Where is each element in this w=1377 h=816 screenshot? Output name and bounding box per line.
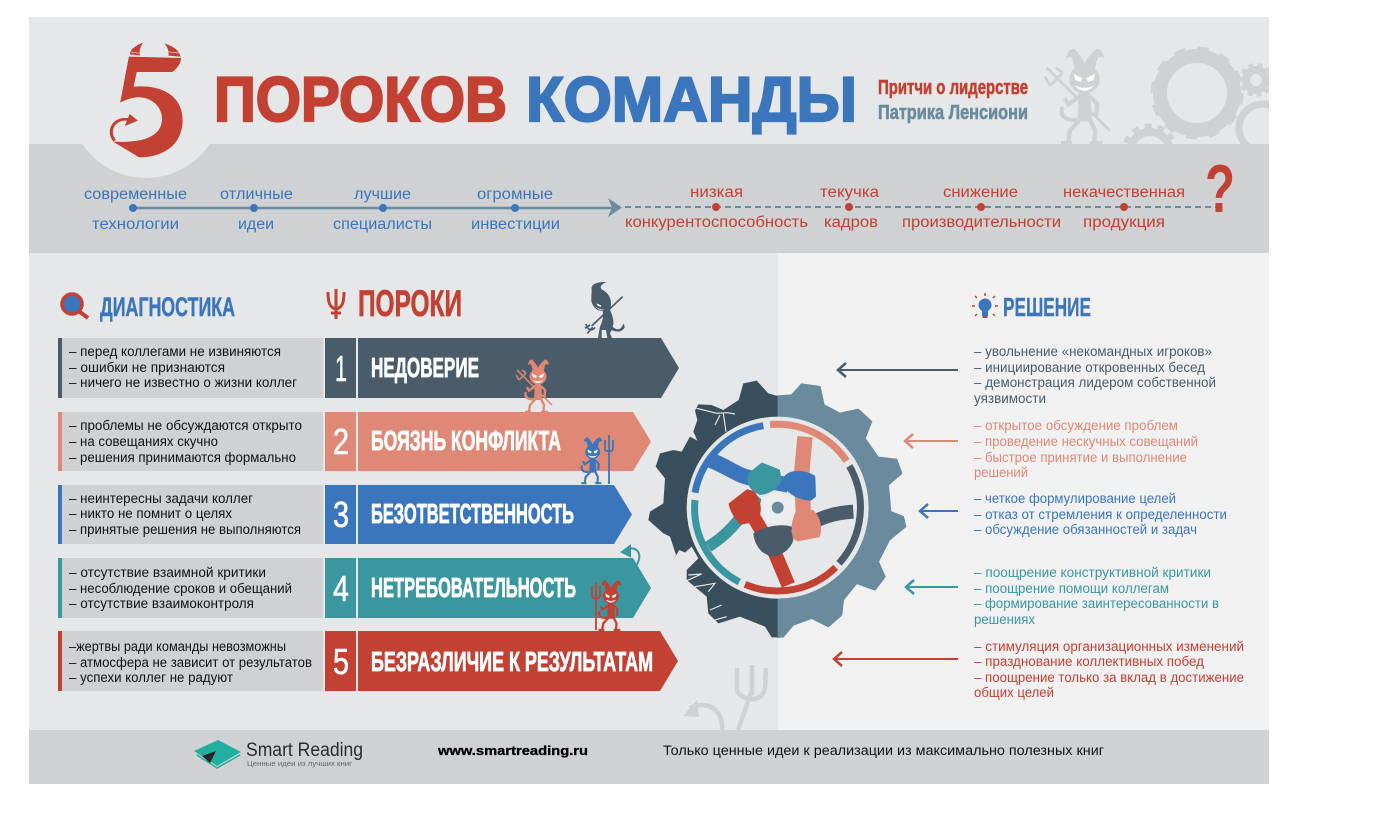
timeline: assets [84,186,622,233]
solutions 5: – поощрение только за вклад в достижение [974,670,1244,685]
gear: inner disc [687,417,869,599]
row 4: diagnostics: – отсутствие взаимоконтроля [69,596,254,611]
footer logo: Smart Reading [246,740,363,761]
gear: broken half [648,381,778,637]
row 4: vice arrow: 4 [333,568,349,609]
gear: cracks [687,408,735,620]
heading: solution: РЕШЕНИЕ [1003,292,1091,322]
timeline: assets: идеи [238,216,274,233]
fist: teal [749,464,780,494]
solutions 2: – проведение нескучных совещаний [974,434,1198,449]
row 4: vice arrow: НЕТРЕБОВАТЕЛЬНОСТЬ [371,572,576,603]
row 1: diagnostics: – ничего не известно о жизни коллег [69,375,297,390]
icon: trident [328,289,344,319]
icon: book [194,740,241,768]
icon: salmon devil [516,360,552,412]
circle behind number [69,24,223,178]
icon: magnifier [62,294,88,318]
heading: solution [972,292,1091,322]
footer logo [194,740,363,768]
arrow 2 [905,434,958,448]
footer logo: Ценные идеи из лучших книг [247,759,352,768]
hub [758,492,796,524]
timeline: assets: современные [84,186,187,203]
timeline: assets: инвестиции [471,216,560,233]
solutions 1: уязвимости [974,391,1046,406]
timeline: consequences: низкая [690,184,743,201]
row 3: vice arrow: БЕЗОТВЕТСТВЕННОСТЬ [371,498,574,529]
arrow 5 [834,652,958,666]
row 4: diagnostics: – несоблюдение сроков и обещаний [69,581,292,596]
solutions 2: – быстрое принятие и выполнение [974,450,1187,465]
row 5: diagnostics: – успехи коллег не радуют [69,670,233,685]
timeline: consequences: некачественная [1063,184,1185,201]
footer slogan: Только ценные идеи к реализации из максимально полезных книг [663,743,1104,758]
solutions 5 [974,639,1244,700]
timeline: consequences: текучка [820,184,879,201]
icon: red devil [592,580,621,630]
question mark: ? [1205,151,1235,227]
heading: vices: ПОРОКИ [358,282,462,324]
solutions 2: – открытое обсуждение проблем [974,418,1178,433]
solutions 2 [974,418,1198,480]
row 3: diagnostics: – неинтересны задачи коллег [69,491,253,506]
footer url: www.smartreading.ru [437,743,588,758]
solutions 2: решений [974,465,1028,480]
footer band [29,730,1269,784]
row 5: diagnostics: – атмосфера не зависит от результатов [69,655,312,670]
row 5: vice arrow [325,631,678,691]
solutions 1: – демонстрация лидером собственной [974,375,1216,390]
row 3: vice arrow [325,485,632,544]
fist: red [730,491,759,523]
timeline: assets: специалисты [333,216,432,233]
fist: dark [755,527,792,555]
fist: blue [785,472,815,499]
row 1: diagnostics: – перед коллегами не извиняются [69,344,281,359]
icon: light bulb [972,293,998,318]
panel: left background [29,253,778,730]
decorative grey tail and fork [683,665,766,730]
icon: blue devil [581,435,613,484]
gear with hands [648,381,906,637]
background devil [1045,49,1110,143]
timeline: assets: огромные [477,186,553,203]
row 2: diagnostics [58,412,323,471]
solutions 3: – четкое формулирование целей [974,491,1176,506]
solutions 4: – поощрение конструктивной критики [974,565,1211,580]
row 2: vice arrow: БОЯЗНЬ КОНФЛИКТА [371,425,561,456]
timeline: consequences: конкурентоспособность [625,214,808,231]
row 2: diagnostics: – решения принимаются формально [69,450,296,465]
timeline: assets: технологии [92,216,179,233]
row 4: diagnostics: – отсутствие взаимной критики [69,565,266,580]
solutions 3: – обсуждение обязанностей и задач [974,522,1197,537]
row 5: vice arrow: 5 [333,641,349,682]
fist: salmon [793,511,820,540]
number five with horns and tail [111,43,183,157]
solutions 1: – увольнение «некомандных игроков» [974,344,1212,359]
subtitle: Притчи о лидерстве [878,76,1028,99]
row 2: vice arrow: 2 [333,421,349,462]
timeline band [29,144,1269,253]
timeline: consequences: продукция [1083,214,1165,231]
heading: diagnostics: ДИАГНОСТИКА [100,292,235,322]
heading: diagnostics [62,292,235,322]
title: КОМАНДЫ [526,65,857,135]
row 4: diagnostics [58,558,323,618]
row 2: diagnostics: – проблемы не обсуждаются открыто [69,418,302,433]
row 3: diagnostics: – принятые решения не выполняются [69,522,301,537]
hub dot [772,502,784,514]
solutions 4: – поощрение помощи коллегам [974,581,1169,596]
row 3: diagnostics [58,485,323,544]
row 3: diagnostics: – никто не помнит о целях [69,506,232,521]
timeline: consequences: снижение [943,184,1018,201]
row 5: diagnostics: –жертвы ради команды невозможны [69,639,286,654]
row 1: vice arrow: 1 [335,348,347,389]
row 2: diagnostics: – на совещаниях скучно [69,434,218,449]
title: ПОРОКОВ [214,65,507,135]
timeline: consequences [625,184,1217,231]
row 1: vice arrow: НЕДОВЕРИЕ [371,352,479,383]
background gears [1124,46,1269,144]
ring arcs and arms [695,424,860,591]
timeline: assets: лучшие [354,186,411,203]
timeline: consequences: кадров [824,214,878,231]
solutions 1 [974,344,1216,406]
row 5: diagnostics [58,631,323,691]
timeline: assets: отличные [220,186,293,203]
solutions 4 [974,565,1219,627]
solutions 1: – инициирование откровенных бесед [974,360,1205,375]
header band [29,17,1269,144]
solutions 3 [974,491,1227,537]
icon: teal tail [622,546,639,566]
row 5: vice arrow: БЕЗРАЗЛИЧИЕ К РЕЗУЛЬТАТАМ [371,646,653,677]
panel: right background [778,253,1269,730]
row 1: vice arrow [325,338,679,398]
gear: intact half [778,384,906,637]
row 3: vice arrow: 3 [333,494,349,535]
row 1: diagnostics: – ошибки не признаются [69,360,225,375]
heading: vices [328,282,462,324]
title [214,65,857,135]
arrow 3 [920,504,958,518]
solutions 5: общих целей [974,685,1054,700]
solutions 4: – формирование заинтересованности в [974,596,1219,611]
solutions 3: – отказ от стремления к определенности [974,507,1227,522]
solutions 4: решениях [974,612,1035,627]
row 1: diagnostics [58,338,323,398]
solutions 5: – празднование коллективных побед [974,654,1204,669]
row 4: vice arrow [325,558,651,618]
icon: dark devil [585,282,625,338]
solutions 5: – стимуляция организационных изменений [974,639,1244,654]
subtitle: Патрика Ленсиони [878,101,1028,124]
timeline: consequences: производительности [902,214,1061,231]
row 2: vice arrow [325,412,651,471]
subtitle [878,76,1028,124]
arrow 1 [838,363,958,377]
arrow 4 [906,580,958,594]
